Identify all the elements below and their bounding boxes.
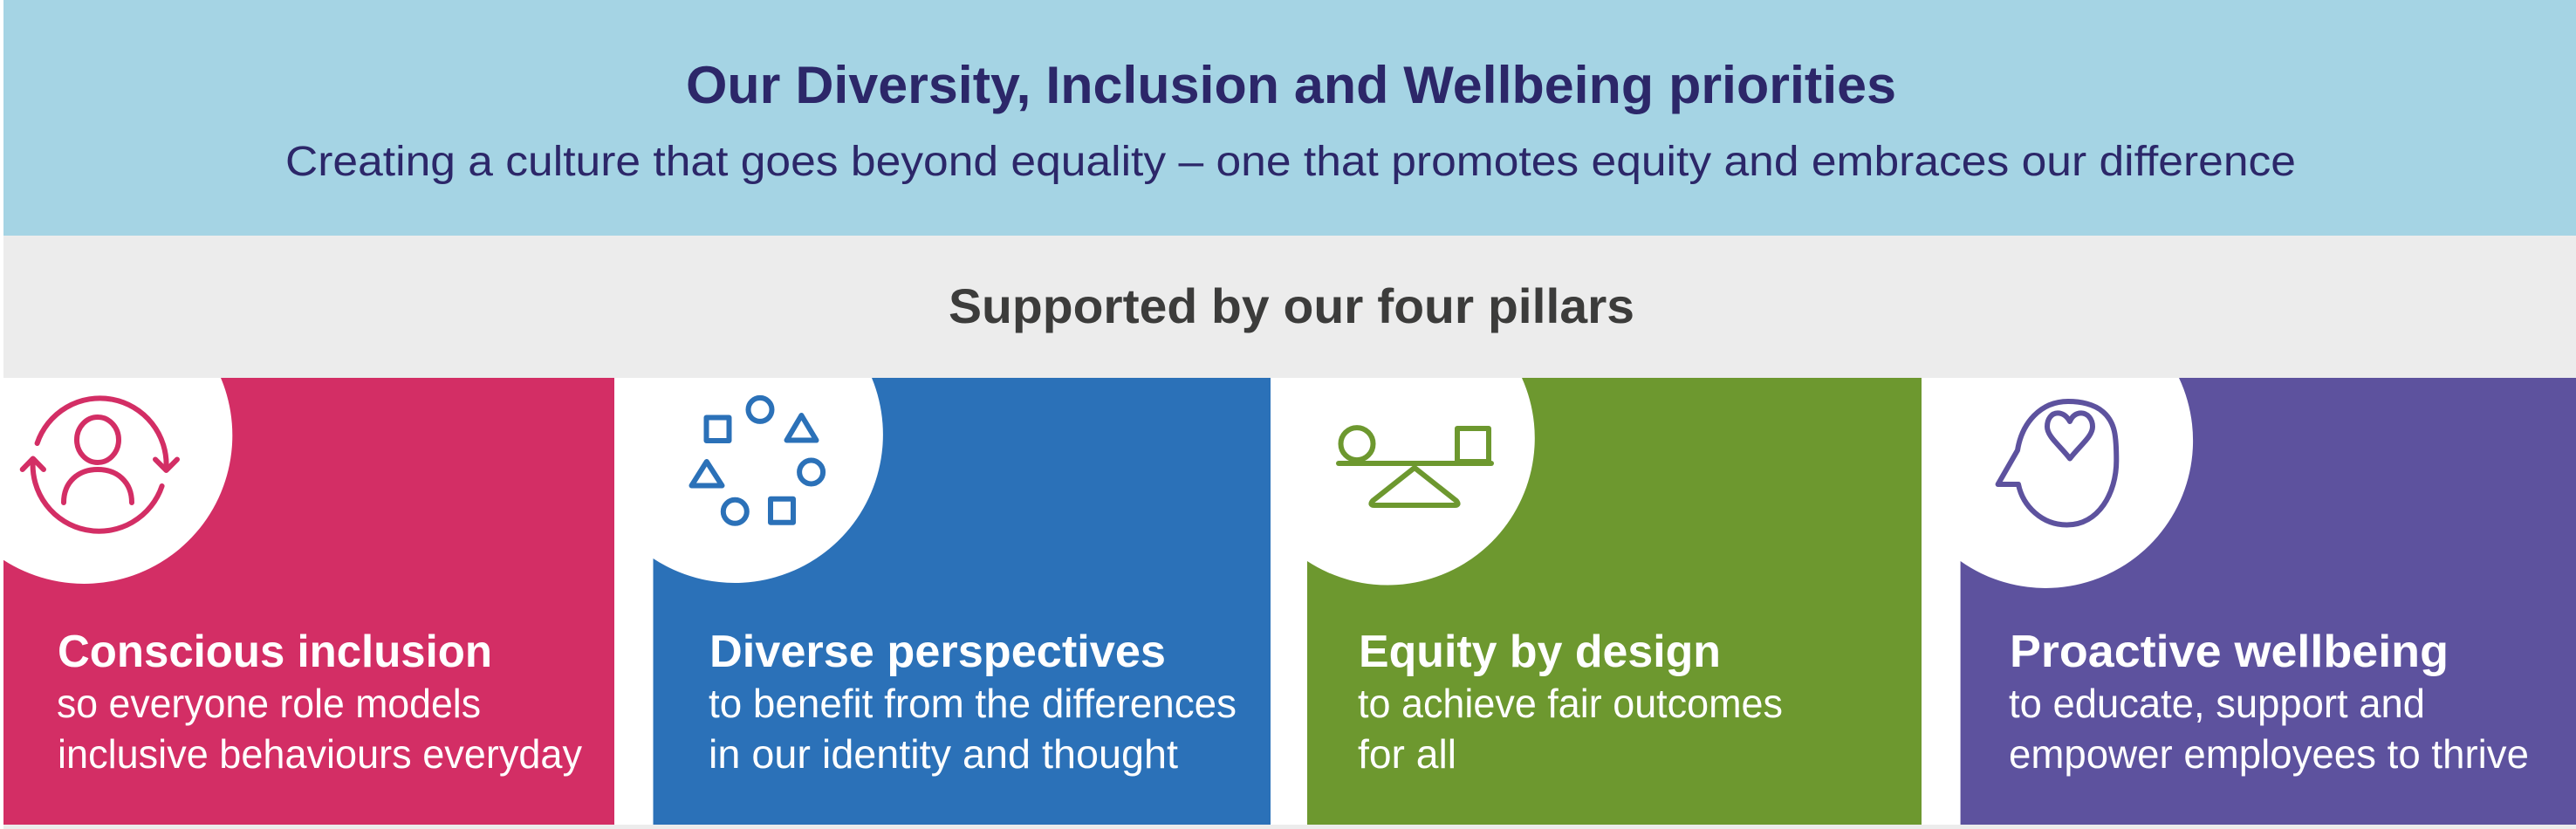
icon: balance seesaw: [1339, 428, 1491, 505]
icon: ring of shapes: [691, 398, 823, 524]
pillar description: inclusive behaviours everyday: [58, 731, 582, 777]
band: supported by four pillars: [3, 236, 2576, 378]
pillar description: to educate, support and: [2009, 681, 2425, 726]
pillar description: to benefit from the differences: [709, 681, 1237, 726]
pillar heading: Conscious inclusion: [58, 627, 492, 677]
pillar description: empower employees to thrive: [2009, 731, 2529, 777]
panel: conscious inclusion: [3, 378, 614, 825]
pillar description: to achieve fair outcomes: [1358, 681, 1783, 726]
pillar description: [2009, 681, 2529, 777]
banner: priorities: [3, 0, 2576, 236]
pillar description: [709, 681, 1237, 777]
pillar description: so everyone role models: [57, 681, 481, 726]
pillar heading: Proactive wellbeing: [2010, 627, 2449, 677]
pillar heading: Diverse perspectives: [709, 627, 1166, 677]
pillar description: for all: [1358, 731, 1456, 777]
icon: head with heart: [1998, 401, 2116, 525]
title: Our Diversity, Inclusion and Wellbeing priorities: [686, 56, 1896, 114]
pillar description: in our identity and thought: [709, 731, 1178, 777]
pillar description: [57, 681, 582, 777]
panel: proactive wellbeing: [1961, 378, 2576, 825]
panel: diverse perspectives: [653, 378, 1271, 825]
heading: supported by our four pillars: Supported by our four pillars: [949, 278, 1634, 333]
icon: person with circular arrows: [23, 398, 177, 531]
pillar description: [1358, 681, 1783, 777]
pillar heading: Equity by design: [1359, 627, 1721, 677]
subtitle: Creating a culture that goes beyond equality – one that promotes equity and embraces our difference: [285, 139, 2296, 185]
panel: equity by design: [1307, 378, 1922, 825]
